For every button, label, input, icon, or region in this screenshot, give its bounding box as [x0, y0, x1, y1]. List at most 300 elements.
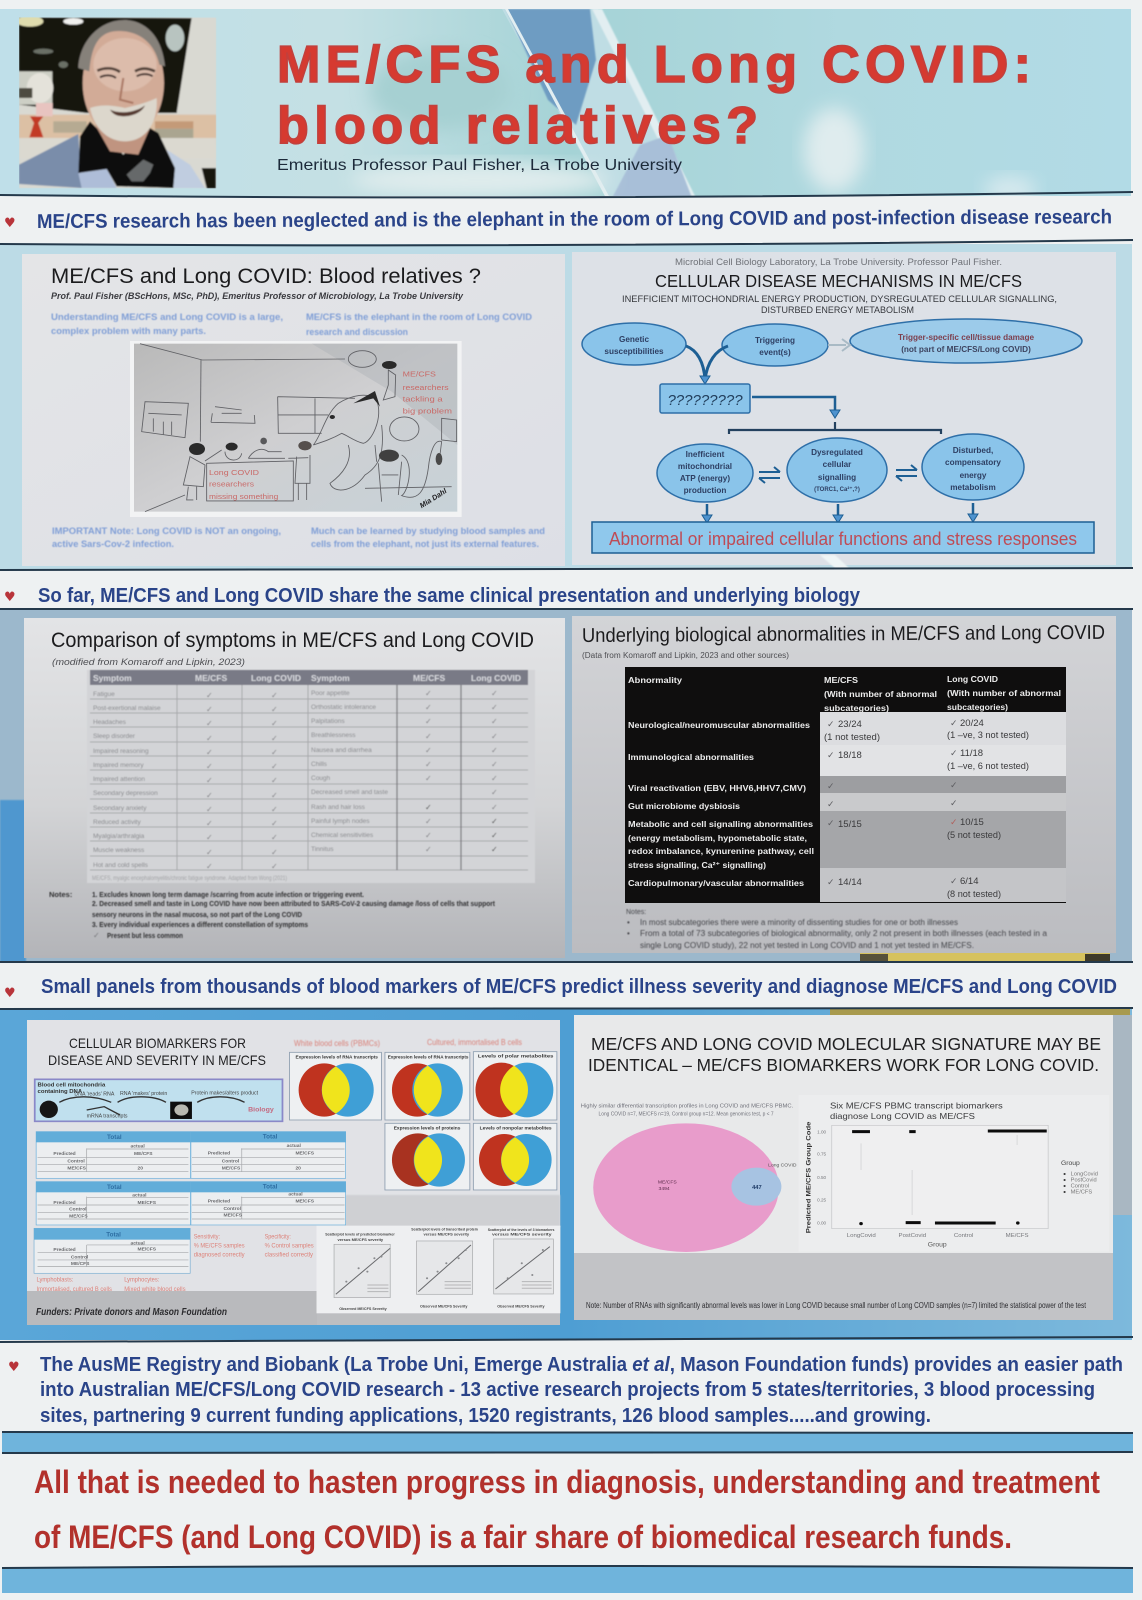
- circle: dysregulated signalling: (TORC1, Ca²⁺,?): [814, 486, 860, 493]
- panel subheading: DISTURBED ENERGY METABOLISM: [761, 305, 914, 316]
- symptoms table: ✓: [271, 734, 278, 743]
- scatter plots: Observed ME/CFS Severity: [420, 1304, 468, 1309]
- row labels: Immunological abnormalities: [628, 752, 754, 762]
- sensitivity and specificity notes: Specificity:: [265, 1233, 291, 1240]
- table notes: 2. Decreased smell and taste in Long COVID have now been attributed to SARS-CoV-2 causing damage /loss of cells that support: [92, 899, 495, 908]
- scatter plots: Scatterplot levels of predicted biomarker: [325, 1232, 395, 1237]
- table notes: In most subcategories there were a minority of dissenting studies for one or both illnesses: [640, 918, 958, 927]
- author credit: Prof. Paul Fisher (BScHons, MSc, PhD), Emeritus Professor of Microbiology, La Trobe University: [51, 291, 464, 301]
- sensitivity and specificity notes: [36, 1233, 314, 1293]
- sensitivity and specificity notes: Lymphoblasts:: [36, 1277, 73, 1284]
- table header: (With number of abnormal: [947, 688, 1061, 698]
- dot plot: predicted group: PostCovid: [899, 1233, 926, 1239]
- closing statement: of ME/CFS (and Long COVID) is a fair share of biomedical research funds.: [34, 1519, 1012, 1555]
- panel: underlying biological abnormalities: [572, 616, 1116, 953]
- registry statement: sites, partnering 9 current funding applications, 1520 registrants, 126 blood samples.....and growing.: [40, 1405, 931, 1427]
- sketch label: Long COVID researchers: Long COVID: [209, 470, 259, 477]
- symptoms table: ✓: [425, 732, 432, 741]
- symptoms table: ✓: [425, 689, 432, 698]
- table values: ✓: [827, 751, 835, 761]
- symptoms table: Post-exertional malaise: [93, 705, 161, 712]
- panel heading: CELLULAR BIOMARKERS FOR: [69, 1035, 246, 1051]
- panel: cellular biomarkers: Levels of nonpolar metabolites: [480, 1126, 552, 1132]
- panel heading: [588, 1034, 1101, 1075]
- symptoms table: ✓: [425, 774, 432, 783]
- table values: (1 not tested): [824, 732, 880, 743]
- section 1 background: [0, 244, 1132, 569]
- confusion matrices: ME/CFS: [134, 1151, 153, 1157]
- symptoms table: ✓: [206, 791, 213, 800]
- biomarker process diagram: Protein makes/alters product: [191, 1090, 259, 1096]
- table values: ✓: [827, 800, 835, 810]
- blue closing text: Much can be learned by studying blood samples and: [311, 526, 545, 536]
- confusion matrices: actual: [131, 1240, 145, 1246]
- blue closing text: active Sars-Cov-2 infection.: [52, 539, 174, 549]
- dot plot: predicted group: Group: [928, 1241, 947, 1248]
- sensitivity and specificity notes: Mixed white blood cells: [124, 1286, 186, 1293]
- symptoms table: Fatigue: [93, 691, 115, 698]
- bullet statement: neglected research: ♥: [4, 216, 16, 231]
- oval: triggering events: event(s): [759, 348, 791, 357]
- symptoms table: Long COVID: [251, 673, 301, 683]
- confusion matrices: Control: [71, 1254, 88, 1260]
- dot plot: predicted group: Control: [1071, 1184, 1089, 1190]
- table header: Long COVID: [947, 674, 998, 684]
- confusion matrices: ME/CFS: [71, 1261, 89, 1267]
- symptoms table: ✓: [206, 819, 213, 828]
- artist signature: Mia Dahl: [418, 486, 449, 510]
- table notes: [626, 909, 1048, 950]
- symptoms table: Symptom: [93, 673, 132, 683]
- symptoms table: ✓: [491, 803, 498, 812]
- table values: ✓: [950, 877, 958, 887]
- table header: Abnormality: [628, 675, 682, 685]
- symptoms table: Symptom: [311, 673, 350, 683]
- venn: PBMC transcripts: ME/CFS: [658, 1179, 677, 1185]
- panel heading: ME/CFS and Long COVID: Blood relatives ?: [51, 265, 481, 288]
- registry statement: ♥: [8, 1360, 20, 1375]
- scatter plots: [317, 1226, 560, 1313]
- row labels: Cardiopulmonary/vascular abnormalities: [628, 878, 804, 888]
- symptoms table: ✓: [425, 831, 432, 840]
- blue intro text: ME/CFS is the elephant in the room of Long COVID: [306, 312, 533, 322]
- dot plot: predicted group: LongCovid: [1071, 1172, 1098, 1178]
- scatter plots: versus ME/CFS severity: [424, 1232, 470, 1237]
- source note: (modified from Komaroff and Lipkin, 2023): [52, 657, 245, 667]
- symptoms table: ✓: [425, 717, 432, 726]
- symptoms table: Chemical sensitivities: [311, 832, 374, 839]
- symptoms table: [87, 670, 535, 883]
- registry statement: [8, 1354, 1123, 1427]
- registry statement: into Australian ME/CFS/Long COVID research - 13 active research projects from 5 states/territories, 3 blood processing: [40, 1379, 1095, 1401]
- symptoms table: ME/CFS, myalgic encephalomyelitis/chronic fatigue syndrome. Adapted from Wong (2021): [92, 876, 287, 882]
- panel heading: CELLULAR DISEASE MECHANISMS IN ME/CFS: [655, 271, 1022, 291]
- table values: (1 –ve, 6 not tested): [947, 761, 1029, 772]
- author line: Emeritus Professor Paul Fisher, La Trobe University: [277, 157, 682, 174]
- confusion matrices: ME/CFS: [222, 1165, 240, 1171]
- oval: genetic susceptibilities: susceptibilities: [604, 347, 664, 356]
- venn headings: [294, 1037, 522, 1048]
- symptoms table: Muscle weakness: [93, 847, 145, 854]
- symptoms table: Impaired memory: [93, 762, 144, 769]
- portrait photo: [17, 16, 216, 188]
- symptoms table: Rash and hair loss: [311, 804, 366, 811]
- confusion matrices: Total: [107, 1184, 122, 1191]
- panel heading: DISEASE AND SEVERITY IN ME/CFS: [48, 1052, 266, 1068]
- blue intro text: research and discussion: [306, 327, 408, 337]
- table notes: •: [627, 918, 630, 927]
- symptoms table: ✓: [491, 817, 498, 826]
- table notes: From a total of 73 subcategories of biological abnormality, only 2 not present in both illnesses (each tested in a: [640, 929, 1048, 938]
- symptoms table: ✓: [271, 833, 278, 842]
- blue divider band: [2, 1432, 1133, 1453]
- circle: compensatory metabolism: metabolism: [950, 483, 996, 492]
- section line 2: [0, 568, 1133, 570]
- symptoms table: ✓: [491, 746, 498, 755]
- symptoms table: ✓: [491, 689, 498, 698]
- sensitivity and specificity notes: % Control samples: [265, 1243, 314, 1250]
- panel heading: [48, 1035, 266, 1068]
- venn: PBMC transcripts: Highly similar differential transcription profiles in Long COVID and ME/CFS PBMC.: [581, 1103, 794, 1109]
- panel: cellular disease mechanisms: [572, 252, 1116, 565]
- venn: PBMC transcripts: Long COVID: [768, 1163, 797, 1169]
- table values: 15/15: [838, 819, 862, 830]
- circle: compensatory metabolism: compensatory: [945, 458, 1001, 467]
- symptoms table: Palpitations: [311, 718, 345, 725]
- confusion matrices: Total: [106, 1231, 121, 1238]
- section 2 background: [0, 610, 1132, 962]
- scatter plots: Scatterplot levels of transcribed protein: [411, 1226, 478, 1231]
- circle: inefficient ATP production: Inefficient: [686, 450, 725, 459]
- confusion matrices: Predicted: [53, 1151, 76, 1157]
- funders: Funders: Private donors and Mason Foundation: [36, 1307, 227, 1318]
- symptoms table: ✓: [491, 845, 498, 854]
- symptoms table: Hot and cold spells: [93, 862, 149, 869]
- confusion matrices: ME/CFS: [295, 1150, 314, 1156]
- confusion matrices: Predicted: [208, 1198, 230, 1204]
- symptoms table: ✓: [206, 734, 213, 743]
- sketch: elephant in the lab: [130, 341, 462, 517]
- biomarker process diagram: [35, 1079, 282, 1121]
- scatter plots: versus ME/CFS severity: [492, 1232, 553, 1237]
- confusion matrices: Control: [222, 1158, 239, 1164]
- panel heading: Comparison of symptoms in ME/CFS and Long COVID: [51, 628, 534, 652]
- symptoms table: ✓: [206, 805, 213, 814]
- confusion matrices: Control: [69, 1207, 87, 1213]
- venn: PBMC transcripts: [581, 1103, 797, 1252]
- confusion matrices: actual: [132, 1193, 146, 1199]
- symptoms table: Tinnitus: [311, 846, 334, 853]
- circle: compensatory metabolism: energy: [960, 471, 987, 480]
- bracket: [729, 422, 941, 434]
- confusion matrices: Control: [67, 1159, 85, 1165]
- arrowheads to functions: [702, 514, 978, 523]
- symptoms table: ✓: [271, 719, 278, 728]
- dot plot: predicted group: Group: [1061, 1160, 1080, 1167]
- table notes: 3. Every individual experiences a different constellation of symptoms: [92, 920, 308, 929]
- table header: ME/CFS: [824, 675, 858, 685]
- symptoms table: ✓: [206, 748, 213, 757]
- blue closing text: cells from the elephant, not just its external features.: [311, 539, 539, 549]
- symptoms table: Myalgia/arthralgia: [93, 833, 145, 840]
- scatter plots: Scatterplot of the levels of 3 biomarkers: [488, 1227, 555, 1232]
- table values: 14/14: [838, 877, 862, 888]
- oval: triggering events: Triggering: [755, 336, 795, 345]
- confusion matrices: Total: [263, 1133, 278, 1140]
- venn: PBMC transcripts: Long COVID n=7, ME/CFS n=19, Control group n=12. Mean genomics test, p < 7: [599, 1112, 774, 1118]
- confusion matrices: Predicted: [53, 1247, 76, 1253]
- symptoms table: ✓: [491, 788, 498, 797]
- sketch label: ME/CFS researchers: big problem: [403, 409, 452, 416]
- symptoms table: Poor appetite: [311, 690, 350, 697]
- confusion matrices: actual: [288, 1192, 303, 1198]
- dot plot: predicted group: Six ME/CFS PBMC transcript biomarkers: [830, 1101, 1003, 1111]
- panel heading: Underlying biological abnormalities in ME/CFS and Long COVID: [582, 622, 1105, 647]
- table values: (5 not tested): [947, 830, 1001, 841]
- symptoms table: ✓: [425, 760, 432, 769]
- sketch label: ME/CFS researchers: ME/CFS: [403, 372, 436, 379]
- symptoms table: Reduced activity: [93, 819, 141, 826]
- symptoms table: ✓: [206, 848, 213, 857]
- symptoms table: ✓: [491, 703, 498, 712]
- biomarker process diagram: RNA 'makes' protein: [120, 1091, 167, 1097]
- dot plot: predicted group: 0.25: [817, 1198, 827, 1203]
- symptoms table: Decreased smell and taste: [311, 789, 388, 796]
- section line 4: [0, 1337, 1133, 1342]
- table values: 23/24: [838, 719, 862, 730]
- confusion matrices: ME/CFS: [138, 1200, 156, 1206]
- panel: cellular biomarkers: [27, 1020, 560, 1325]
- oval: trigger-specific damage: [850, 319, 1082, 363]
- confusion matrices: ME/CFS: [67, 1165, 86, 1171]
- confusion matrices: Control: [224, 1206, 241, 1212]
- symptoms table: Painful lymph nodes: [311, 818, 370, 825]
- closing statement: [34, 1464, 1100, 1555]
- confusion matrices: ME/CFS: [138, 1246, 156, 1252]
- sketch label: Long COVID researchers: [209, 470, 278, 501]
- dot plot: predicted group: LongCovid: [847, 1233, 876, 1239]
- symptoms table: ✓: [271, 862, 278, 871]
- table values: 18/18: [838, 750, 862, 761]
- sensitivity and specificity notes: Lymphocytes:: [124, 1277, 159, 1284]
- circle: dysregulated signalling: Dysregulated: [811, 448, 863, 457]
- oval: genetic susceptibilities: Genetic: [619, 335, 649, 344]
- confusion matrices: 20: [138, 1165, 143, 1171]
- circle: compensatory metabolism: Disturbed,: [953, 446, 993, 455]
- symptoms table: ✓: [206, 719, 213, 728]
- symptoms table: Cough: [311, 775, 331, 782]
- abnormalities table: [625, 667, 1066, 903]
- table values: 10/15: [960, 817, 984, 828]
- symptoms table: Secondary depression: [93, 790, 158, 797]
- symptoms table: Sleep disorder: [93, 733, 136, 740]
- glass streak at section bottom: [820, 555, 850, 569]
- blue intro text: complex problem with many parts.: [51, 326, 206, 336]
- symptoms table: ✓: [206, 776, 213, 785]
- table values: 6/14: [960, 876, 978, 887]
- panel: cellular biomarkers: Expression levels of proteins: [394, 1126, 461, 1132]
- table values: (8 not tested): [947, 889, 1001, 900]
- table values: ✓: [827, 819, 835, 829]
- title: blood relatives?: [277, 97, 758, 155]
- equilibrium arrows: [759, 465, 917, 483]
- dot plot: predicted group: Predicted ME/CFS Group Code: [806, 1121, 813, 1233]
- bullet statement: shared biology: So far, ME/CFS and Long COVID share the same clinical presentation and underlying biology: [38, 585, 861, 607]
- panel: cellular biomarkers: Expression levels of RNA transcripts: [388, 1054, 469, 1060]
- table header: [628, 674, 1061, 713]
- down arrows to functions: [707, 503, 973, 516]
- panel: cellular biomarkers: Levels of polar metabolites: [478, 1054, 554, 1060]
- table values: [824, 718, 1029, 900]
- circle: inefficient ATP production: ATP (energy): [680, 474, 730, 483]
- row labels: redox imbalance, kynurenine pathway, cell: [628, 846, 814, 856]
- panel: comparison of symptoms: [24, 618, 565, 958]
- table notes: single Long COVID study), 22 not yet tested in Long COVID and 1 not yet tested in ME/CFS.: [640, 941, 974, 950]
- sketch label: Long COVID researchers: missing something: [209, 494, 278, 501]
- section line 1: [0, 192, 1133, 197]
- box: abnormal functions: Abnormal or impaired cellular functions and stress responses: [609, 529, 1077, 549]
- table values: ✓: [950, 818, 958, 828]
- dot plot: predicted group: 0.50: [817, 1175, 827, 1180]
- dot plot: predicted group: diagnose Long COVID as ME/CFS: [830, 1111, 975, 1121]
- symptoms table: ✓: [271, 705, 278, 714]
- oval: trigger-specific damage: (not part of ME/CFS/Long COVID): [901, 345, 1031, 354]
- sensitivity and specificity notes: Sensitivity:: [194, 1233, 220, 1240]
- banner glass streak: [350, 9, 1036, 204]
- table notes: •: [627, 929, 630, 938]
- symptoms table: ✓: [425, 845, 432, 854]
- confusion matrices: Total: [107, 1134, 122, 1141]
- arrowhead: converging: [700, 376, 710, 384]
- table values: ✓: [827, 878, 835, 888]
- table values: ✓: [950, 799, 958, 809]
- table notes: ✓: [93, 931, 100, 940]
- row labels: [628, 720, 814, 888]
- dot plot: predicted group: 0.00: [817, 1221, 827, 1226]
- bullet statement: small panels of blood markers: ♥: [4, 986, 16, 1001]
- registry statement: The AusME Registry and Biobank (La Trobe Uni, Emerge Australia et al, Mason Foundation funds) provides an easier path: [40, 1354, 1123, 1376]
- panel: molecular signature: [574, 1015, 1113, 1320]
- box: abnormal functions: [592, 522, 1094, 553]
- biomarker process diagram: mRNA transcripts: [87, 1114, 128, 1120]
- arrowhead: to effects: [830, 410, 840, 418]
- symptoms table: ✓: [206, 862, 213, 871]
- table notes: Notes:: [49, 890, 72, 899]
- symptoms table: Impaired attention: [93, 776, 145, 783]
- confusion matrices: Total: [263, 1183, 278, 1190]
- oval: genetic susceptibilities: [582, 323, 686, 365]
- oval: triggering events: [722, 324, 828, 366]
- symptoms table: ✓: [206, 762, 213, 771]
- row labels: stress signalling, Ca²⁺ signalling): [628, 860, 766, 870]
- symptoms table: ✓: [425, 703, 432, 712]
- biomarker process diagram: containing DNA: [38, 1089, 83, 1095]
- table notes: Present but less common: [107, 931, 183, 940]
- biomarker process diagram: DNA 'reads' RNA: [74, 1092, 115, 1098]
- sketch label: Long COVID researchers: researchers: [209, 482, 255, 489]
- sensitivity and specificity notes: classified correctly: [265, 1252, 314, 1259]
- scatter plots: Observed ME/CFS Severity: [339, 1306, 387, 1311]
- scatter plots: Observed ME/CFS Severity: [497, 1304, 545, 1309]
- symptoms table: ✓: [271, 776, 278, 785]
- symptoms table: ✓: [425, 803, 432, 812]
- table values: ✓: [950, 781, 958, 791]
- sketch label: ME/CFS researchers: [403, 372, 452, 416]
- venn: PBMC transcripts: 447: [752, 1185, 762, 1191]
- symptoms table: ✓: [425, 746, 432, 755]
- table values: ✓: [950, 749, 958, 759]
- arrows: converging to unknown: [686, 346, 728, 380]
- circle: compensatory metabolism: [922, 434, 1024, 500]
- symptoms table: ✓: [206, 705, 213, 714]
- sensitivity and specificity notes: % ME/CFS samples: [194, 1243, 245, 1250]
- blue closing text: [52, 526, 545, 549]
- dot plot: predicted group: ME/CFS: [1071, 1190, 1093, 1196]
- table values: 11/18: [960, 748, 983, 759]
- symptoms table: Long COVID: [471, 673, 521, 683]
- box: unknown mechanism: [660, 384, 750, 413]
- circle: inefficient ATP production: production: [684, 486, 726, 495]
- symptoms table: ✓: [491, 717, 498, 726]
- blue intro text: [51, 312, 533, 337]
- symptoms table: ✓: [271, 791, 278, 800]
- symptoms table: ✓: [271, 748, 278, 757]
- arrow: to trigger-specific damage: [828, 339, 850, 351]
- panel: elephant in the room: [22, 254, 565, 566]
- confusion matrices: ME/CFS: [69, 1213, 88, 1219]
- panel subheading: [622, 294, 1057, 316]
- table notes: sensory neurons in the nasal mucosa, so not part of the Long COVID: [92, 910, 302, 919]
- venn headings: Cultured, immortalised B cells: [427, 1037, 522, 1047]
- panel subheading: INEFFICIENT MITOCHONDRIAL ENERGY PRODUCTION, DYSREGULATED CELLULAR SIGNALLING,: [622, 294, 1057, 305]
- circle: dysregulated signalling: [787, 438, 887, 502]
- dot plot: predicted group: [806, 1101, 1098, 1248]
- symptoms table: ✓: [271, 848, 278, 857]
- bullet statement: shared biology: ♥: [4, 590, 16, 605]
- symptoms table: Breathlessness: [311, 732, 356, 739]
- circle: dysregulated signalling: signalling: [818, 473, 856, 482]
- box: unknown mechanism: ?????????: [667, 392, 743, 409]
- symptoms table: ✓: [271, 691, 278, 700]
- sensitivity and specificity notes: diagnosed correctly: [194, 1252, 245, 1259]
- table notes: 1. Excludes known long term damage /scarring from acute infection or triggering event.: [92, 890, 364, 899]
- symptoms table: Secondary anxiety: [93, 805, 147, 812]
- title: [277, 36, 1031, 155]
- row labels: (energy metabolism, hypometabolic state,: [628, 833, 807, 843]
- circle: dysregulated signalling: cellular: [823, 460, 852, 469]
- section line 3: [0, 961, 1133, 963]
- sketch label: ME/CFS researchers: researchers: [403, 385, 449, 392]
- dot plot: predicted group: 1.00: [817, 1130, 827, 1135]
- dot plot: predicted group: ME/CFS: [1006, 1233, 1029, 1239]
- row labels: Gut microbiome dysbiosis: [628, 801, 740, 811]
- sensitivity and specificity notes: Immortalised, cultured B cells: [36, 1286, 112, 1293]
- arrow: unknown to effects: [752, 397, 835, 412]
- symptoms table: ✓: [491, 774, 498, 783]
- symptoms table: ✓: [206, 691, 213, 700]
- table values: ✓: [950, 719, 958, 729]
- confusion matrices: actual: [287, 1143, 301, 1149]
- dot plot: predicted group: 0.75: [817, 1151, 827, 1156]
- table notes: [49, 890, 495, 940]
- biomarker process diagram: Blood cell mitochondria: [38, 1082, 106, 1088]
- confusion matrices: [34, 1132, 346, 1273]
- dot plot: predicted group: Control: [954, 1233, 973, 1239]
- symptoms table: ✓: [271, 819, 278, 828]
- panel heading: ME/CFS AND LONG COVID MOLECULAR SIGNATURE MAY BE: [591, 1034, 1101, 1054]
- row labels: Metabolic and cell signalling abnormalities: [628, 819, 813, 829]
- symptoms table: ✓: [271, 762, 278, 771]
